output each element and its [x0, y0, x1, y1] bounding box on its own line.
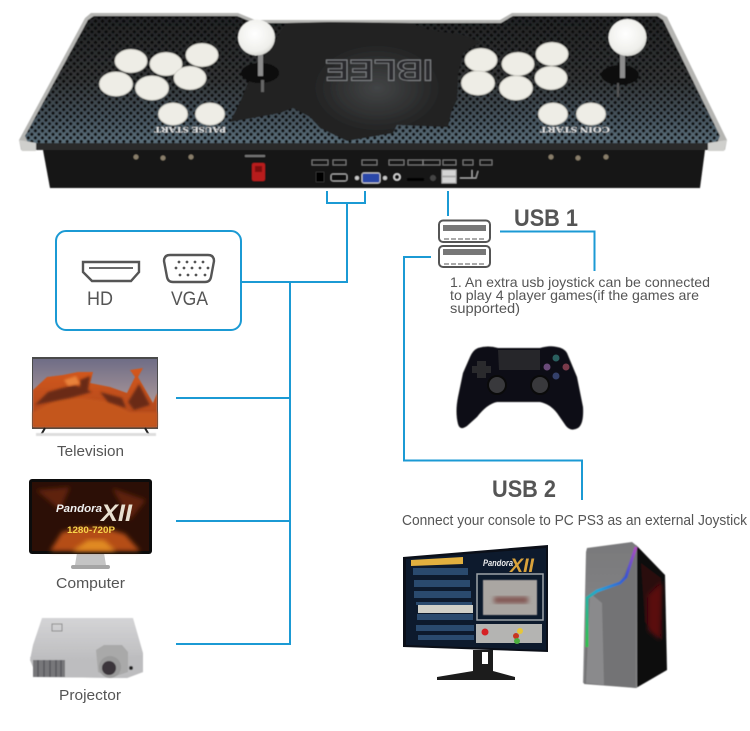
Projector label: Projector [59, 687, 121, 704]
projector control [52, 624, 62, 631]
blue connector tree to displays [176, 282, 290, 644]
USB 1 description: 1. An extra usb joystick can be connected [450, 274, 710, 290]
tower side panel [636, 545, 667, 688]
HD label: HD [87, 289, 113, 310]
IBLE embossed logo: IBLEE [325, 53, 433, 86]
gamepad D-pad [472, 361, 491, 378]
resolution text: 1280-720P [67, 525, 115, 535]
game logo: Pandora [483, 558, 513, 568]
USB 2 heading: USB 2 [492, 476, 556, 503]
projector body [30, 618, 143, 678]
right joystick [601, 19, 646, 97]
USB 1 description: to play 4 player games(if the games are [450, 287, 699, 303]
computer monitor [29, 479, 152, 569]
Computer label: Computer [56, 575, 125, 592]
console ports [316, 170, 478, 183]
left button labels: PAUSE START [153, 125, 226, 134]
tower front panel [583, 542, 637, 688]
monitor screen [403, 545, 548, 652]
blue connector: console to USB [447, 191, 449, 216]
icon: HDMI port [83, 262, 139, 281]
stand cable hole [482, 652, 488, 664]
preview window [477, 574, 543, 620]
projector vent [33, 660, 65, 677]
TV legs [41, 428, 149, 435]
monitor stand [437, 650, 515, 680]
blue connector: USB 2 [404, 257, 582, 500]
gaming PC tower [583, 542, 667, 688]
gamepad sticks [488, 376, 549, 394]
RGB light strip [587, 547, 636, 647]
projector lens [96, 645, 128, 678]
console front panel [43, 150, 705, 188]
gamepad [456, 346, 583, 430]
USB 1 heading: USB 1 [514, 205, 578, 232]
power switch [245, 155, 265, 181]
Television label: Television [57, 443, 124, 460]
TV shadow [36, 433, 156, 436]
arcade console [19, 13, 727, 188]
monitor stand [75, 553, 106, 565]
blue connector: USB 1 to note [500, 232, 594, 271]
console top panel [19, 13, 727, 151]
TV screen [32, 357, 158, 429]
port labels [312, 160, 492, 165]
blue connector: console to HD and VGA [242, 191, 365, 282]
right button labels: COIN START [539, 125, 610, 134]
gamepad face buttons [544, 354, 570, 380]
desktop monitor [403, 545, 548, 680]
monitor screen [29, 479, 152, 554]
icon: USB ports [439, 220, 490, 267]
side screws [134, 154, 608, 160]
desktop monitor: XII [509, 556, 535, 577]
VGA label: VGA [171, 289, 208, 310]
USB 1 description: supported) [450, 300, 520, 316]
icon: VGA port [164, 255, 214, 282]
computer monitor: XII [99, 500, 133, 527]
USB 1 description [450, 274, 710, 316]
panel: HD and VGA [56, 231, 241, 330]
menu list [411, 557, 474, 640]
gamepad touchpad [498, 350, 540, 370]
television [32, 357, 158, 436]
white arcade buttons right [462, 42, 606, 125]
central worn artwork [230, 22, 480, 141]
white arcade buttons left [100, 44, 224, 125]
projector [30, 618, 143, 678]
left joystick [238, 20, 279, 92]
control legend [476, 624, 542, 644]
game logo: Pandora [56, 503, 102, 515]
